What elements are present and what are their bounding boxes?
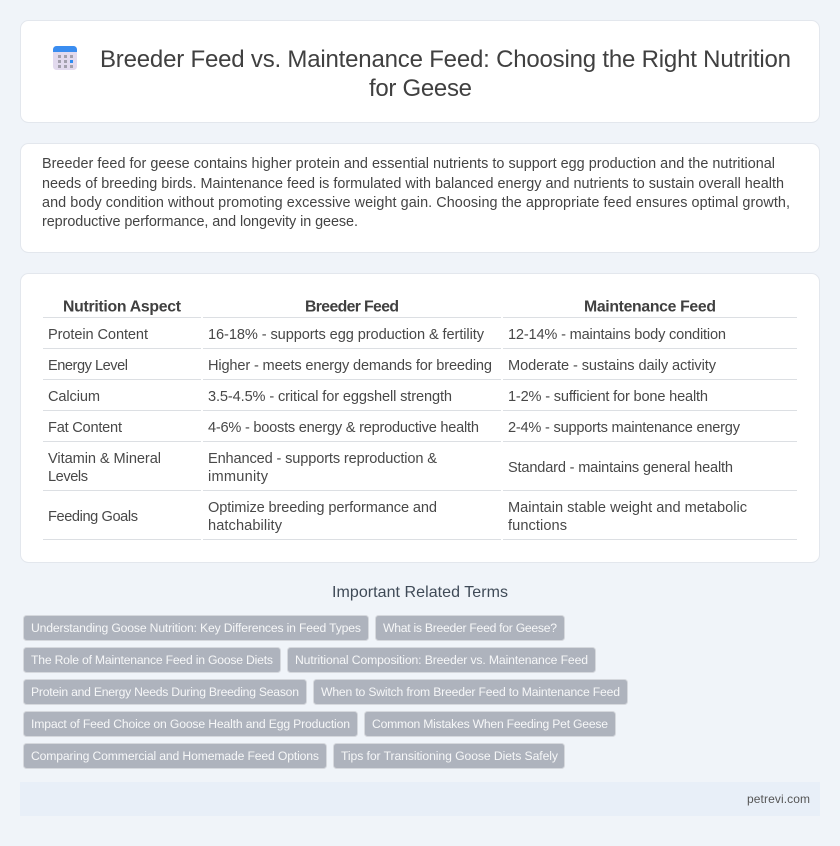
tag: What is Breeder Feed for Geese? <box>383 621 557 635</box>
tag <box>364 712 616 736</box>
table header: Nutrition Aspect <box>63 298 182 316</box>
title <box>100 46 791 102</box>
row: feeding goals: Maintain stable weight and metabolic <box>508 500 747 516</box>
related term tags <box>24 616 628 768</box>
text block: introduction: and body condition without promoting excessive weight gain. Choosing the appropriate feed ensures optimal growth, <box>42 195 790 211</box>
text block: introduction: Breeder feed for geese contains higher protein and essential nutrients to support egg production and the nutritional <box>42 156 775 172</box>
tag: Impact of Feed Choice on Goose Health and Egg Production <box>31 717 350 731</box>
title: for Geese <box>369 75 472 102</box>
text block: introduction <box>42 156 790 230</box>
table header <box>43 298 797 318</box>
tag: Tips for Transitioning Goose Diets Safely <box>341 749 559 763</box>
row: feeding goals <box>43 500 797 540</box>
row: feeding goals: Optimize breeding performance and <box>208 500 437 516</box>
table header: Breeder Feed <box>305 298 399 316</box>
tag <box>24 616 368 640</box>
tag: Common Mistakes When Feeding Pet Geese <box>372 717 608 731</box>
row: calcium: Calcium <box>48 389 100 405</box>
row: protein content: 12-14% - maintains body condition <box>508 327 726 343</box>
title: Breeder Feed vs. Maintenance Feed: Choosing the Right Nutrition <box>100 46 791 73</box>
text block: introduction: needs of breeding birds. Maintenance feed is formulated with balanced energy and nutrients to sustain overall health <box>42 176 784 192</box>
table header: Maintenance Feed <box>584 298 716 316</box>
row: vitamin and mineral levels: Levels <box>48 469 88 485</box>
row: protein content: Protein Content <box>48 327 148 343</box>
row: vitamin and mineral levels: Vitamin & Mineral <box>48 451 161 467</box>
tag: Nutritional Composition: Breeder vs. Maintenance Feed <box>295 653 588 667</box>
tag <box>24 680 306 704</box>
row: protein content <box>43 327 797 349</box>
heading: important related terms: Important Related Terms <box>332 584 508 601</box>
tag: Comparing Commercial and Homemade Feed Options <box>31 749 319 763</box>
row: energy level: Higher - meets energy demands for breeding <box>208 358 492 374</box>
row: feeding goals: Feeding Goals <box>48 509 138 525</box>
footer <box>20 782 820 816</box>
row: vitamin and mineral levels: Enhanced - supports reproduction & <box>208 451 437 467</box>
panel: introduction <box>20 144 820 252</box>
tag: When to Switch from Breeder Feed to Maintenance Feed <box>321 685 620 699</box>
row: fat content: 2-4% - supports maintenance energy <box>508 420 741 436</box>
panel: title card <box>20 20 820 122</box>
row: fat content: 4-6% - boosts energy & reproductive health <box>208 420 479 436</box>
row: protein content: 16-18% - supports egg production & fertility <box>208 327 485 343</box>
panel: comparison table <box>20 274 820 562</box>
row: feeding goals: functions <box>508 518 567 534</box>
row: energy level: Energy Level <box>48 358 128 374</box>
row: vitamin and mineral levels <box>43 451 797 491</box>
tag <box>314 680 628 704</box>
row: fat content <box>43 420 797 442</box>
row: fat content: Fat Content <box>48 420 122 436</box>
tag <box>334 744 564 768</box>
text block: introduction: reproductive performance, and longevity in geese. <box>42 214 358 230</box>
tag <box>24 712 358 736</box>
tag <box>288 648 596 672</box>
row: calcium: 3.5-4.5% - critical for eggshell strength <box>208 389 452 405</box>
row: feeding goals: hatchability <box>208 518 283 534</box>
tag: Protein and Energy Needs During Breeding Season <box>31 685 299 699</box>
tag <box>376 616 564 640</box>
row: energy level: Moderate - sustains daily activity <box>508 358 717 374</box>
tag <box>24 744 326 768</box>
tag: The Role of Maintenance Feed in Goose Diets <box>31 653 273 667</box>
tag: Understanding Goose Nutrition: Key Differences in Feed Types <box>31 621 361 635</box>
row: calcium: 1-2% - sufficient for bone health <box>508 389 708 405</box>
tag <box>24 648 280 672</box>
row: energy level <box>43 358 797 380</box>
row: vitamin and mineral levels: immunity <box>208 469 269 485</box>
footer: petrevi.com <box>747 792 810 806</box>
row: calcium <box>43 389 797 411</box>
icon: calendar <box>53 46 77 70</box>
row: vitamin and mineral levels: Standard - maintains general health <box>508 460 733 476</box>
